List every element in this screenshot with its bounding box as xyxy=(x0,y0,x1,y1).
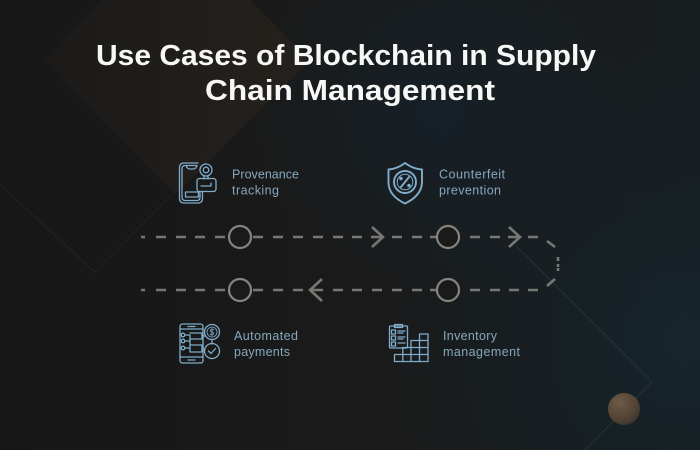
arrow: right 1 xyxy=(371,227,383,247)
label: counterfeit prevention: prevention xyxy=(439,184,501,198)
label: provenance tracking xyxy=(232,168,299,198)
label: inventory management xyxy=(443,329,521,359)
node: inventory xyxy=(437,279,459,301)
node: counterfeit xyxy=(437,226,459,248)
label: counterfeit prevention: Counterfeit xyxy=(439,168,506,182)
label: automated payments xyxy=(234,329,298,359)
icon: phone with payment coin and check xyxy=(180,324,220,363)
icon: phone with location pin xyxy=(180,163,216,203)
icon: shield with percent xyxy=(388,163,422,204)
title xyxy=(96,40,596,107)
label: provenance tracking: tracking xyxy=(232,184,279,198)
label: provenance tracking: Provenance xyxy=(232,168,299,182)
node: provenance xyxy=(229,226,251,248)
node: automated xyxy=(229,279,251,301)
diamond outline right xyxy=(516,246,652,450)
label: automated payments: Automated xyxy=(234,329,298,343)
dashed flow path xyxy=(141,237,558,290)
title: Use Cases of Blockchain in Supply xyxy=(96,40,596,72)
label: inventory management: management xyxy=(443,345,521,359)
label: automated payments: payments xyxy=(234,345,290,359)
label: inventory management: Inventory xyxy=(443,329,498,343)
arrow: left xyxy=(310,279,323,301)
diamond outline left xyxy=(0,60,306,272)
arrow: right 2 xyxy=(508,227,520,247)
title: Chain Management xyxy=(205,75,495,107)
label: counterfeit prevention xyxy=(439,168,506,198)
decorative sphere xyxy=(608,393,640,425)
icon: clipboard with stacked boxes xyxy=(390,324,428,362)
brown diamond xyxy=(42,0,310,194)
